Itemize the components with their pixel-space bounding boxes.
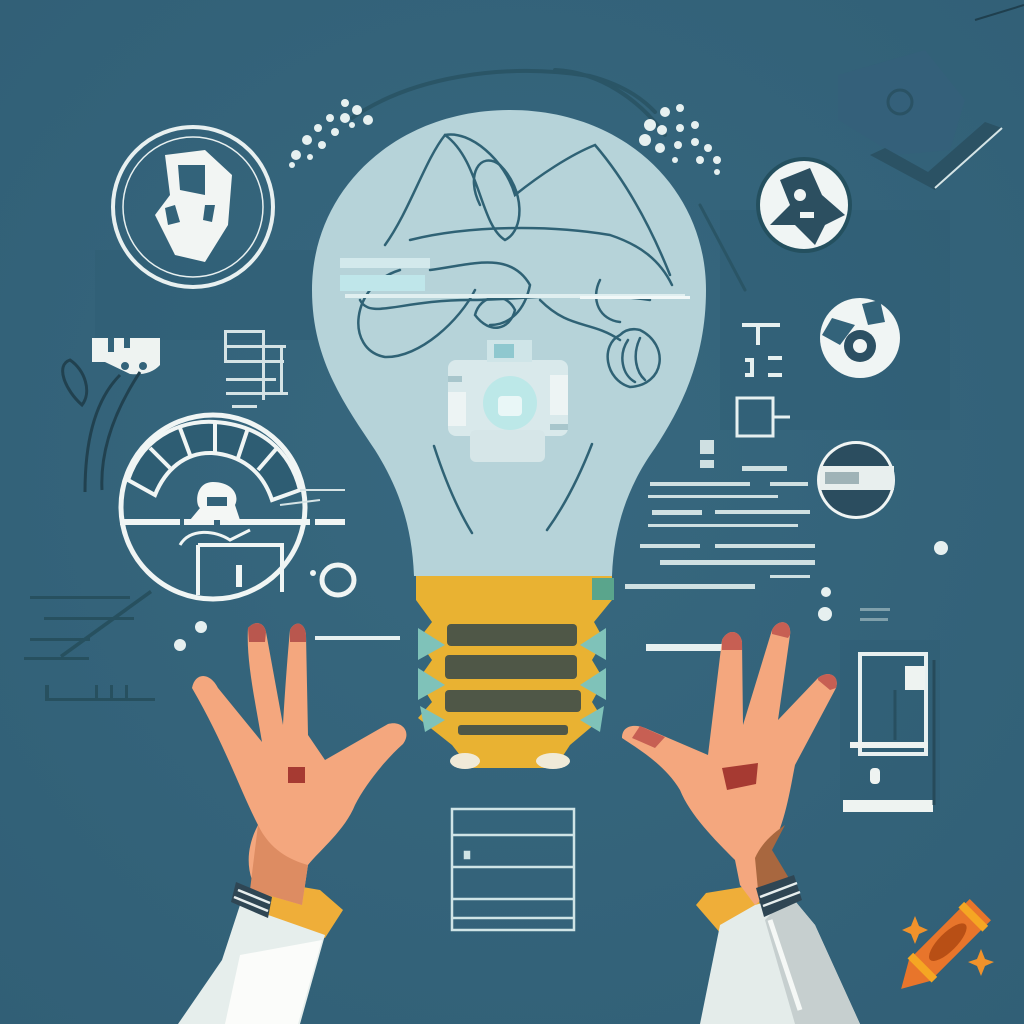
dots and dashes near hands <box>174 621 724 651</box>
icon: dotted cluster left <box>289 99 373 168</box>
icon: document at right <box>843 654 934 812</box>
icon: top-left badge <box>113 127 273 287</box>
left faint lines <box>24 590 155 701</box>
right dots <box>818 541 948 621</box>
icon: left label chip <box>63 338 160 492</box>
arc above bulb <box>352 70 745 290</box>
icon: bulb glass <box>312 110 706 576</box>
icon: left gauge dial <box>120 415 354 599</box>
icon: right striped badge <box>817 441 895 519</box>
bulb line drawing <box>358 134 672 533</box>
icon: crayon logo <box>889 898 994 1001</box>
icon: table card <box>452 809 574 930</box>
bulb highlight bars <box>340 258 690 299</box>
icon: left hand <box>178 623 406 1024</box>
icon: left dashed table <box>224 330 288 408</box>
icon: camera in bulb <box>448 340 568 462</box>
icon: right hand <box>622 622 860 1024</box>
icon: small bracket glyphs <box>737 325 790 436</box>
icon: right ring <box>820 298 900 378</box>
icon: dotted cluster right <box>639 104 721 175</box>
icon: top-right faint device <box>838 5 1024 190</box>
right text lines <box>625 440 815 589</box>
panel: faint backdrop blocks <box>95 210 950 810</box>
icon: right circle character <box>756 157 852 253</box>
icon: bulb screw base <box>416 576 614 769</box>
